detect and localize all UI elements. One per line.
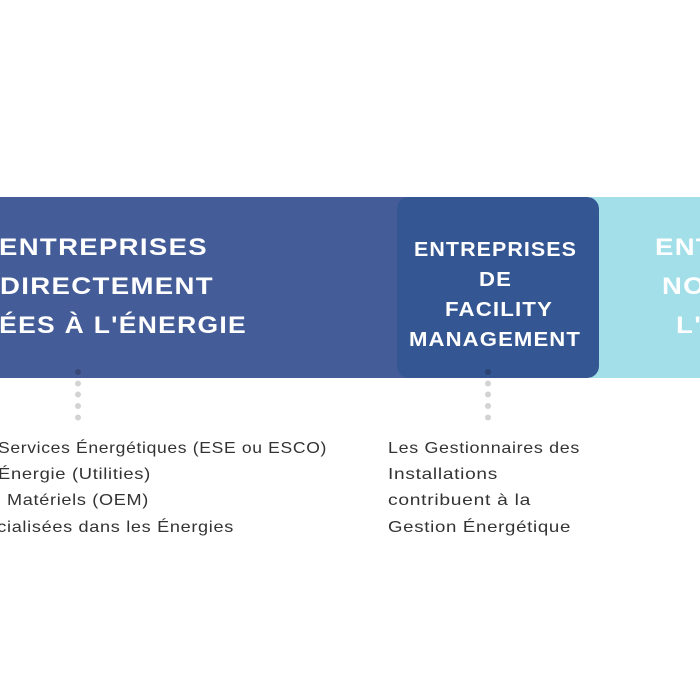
text block: energy company types: Services Énergétiques (ESE ou ESCO) [0,438,327,457]
heading: facility management: DE [479,269,512,291]
text block: energy company types [0,438,327,536]
panel: companies not linked to energy [590,197,700,378]
text block: facility managers: Les Gestionnaires des [388,440,580,457]
heading: facility management: FACILITY [445,299,553,321]
text block: facility managers [388,440,580,536]
text block: energy company types: Énergie (Utilities) [0,464,151,483]
dotted connector: middle column [485,369,491,420]
text block: facility managers: Installations [388,466,498,483]
text block: facility managers: Gestion Énergétique [388,517,571,536]
dotted connector: left column [75,369,81,420]
panel: facility management companies [397,197,599,378]
heading: facility management: ENTREPRISES [414,239,577,261]
panel: companies directly linked to energy [0,197,420,378]
text block: energy company types: Matériels (OEM) [7,492,149,509]
heading: facility management: MANAGEMENT [409,329,581,351]
text block: facility managers: contribuent à la [388,492,531,509]
heading: directly linked companies: ENTREPRISES [0,234,208,261]
heading: non-energy companies [655,234,700,339]
heading: facility management [409,239,581,351]
heading: directly linked companies [0,234,247,339]
heading: directly linked companies: DIRECTEMENT [0,273,214,300]
